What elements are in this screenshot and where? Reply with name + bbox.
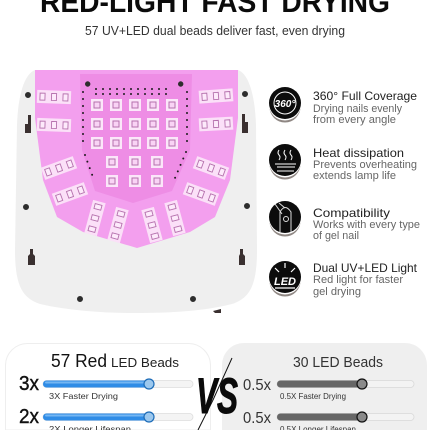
icon: nail: [269, 201, 301, 236]
text: dual light: Red light for faster: [313, 274, 403, 286]
text: 360 coverage: from every angle: [313, 114, 396, 126]
lamp body: [15, 70, 257, 313]
metric: 0.5x drying: 0.5x: [243, 377, 271, 394]
text: heat dissipation: [313, 146, 417, 182]
metric: 2x lifespan: 2x: [19, 406, 39, 428]
text: heat dissipation: Heat dissipation: [313, 146, 404, 160]
icon: 360 arrow: [269, 87, 301, 122]
metric: 0.5x lifespan: [243, 410, 414, 430]
side LED beads: [37, 88, 233, 206]
panel heading: 30 LED Beads: [293, 355, 383, 371]
metric: 0.5x lifespan: 0.5x: [243, 410, 271, 427]
text: 360 coverage: 360° Full Coverage: [313, 89, 417, 103]
text: dual light: gel drying: [313, 286, 361, 298]
icon: heat waves: [269, 144, 301, 180]
text: 360 coverage: Drying nails evenly: [313, 103, 402, 115]
text: dual light: [313, 261, 418, 298]
key slots: [25, 114, 248, 313]
text: heat dissipation: Prevents overheating: [313, 159, 417, 171]
subtitle: 57 UV+LED dual beads deliver fast, even drying: [85, 24, 345, 38]
metric: 3x drying: 3X Faster Drying: [49, 391, 118, 401]
metric: 0.5x drying: 0.5X Faster Drying: [280, 392, 346, 401]
vent dots: [83, 89, 187, 180]
VS badge: [196, 358, 238, 430]
text: 360 coverage: [313, 89, 417, 126]
pink reflector: [35, 70, 238, 248]
metric: 2x lifespan: [19, 406, 193, 430]
inner panel: [80, 74, 192, 203]
center LED beads: [91, 99, 178, 187]
metric: 3x drying: 3x: [19, 373, 39, 395]
text: compatibility: of gel nail: [313, 230, 359, 242]
panel heading: 57 Red: [51, 351, 107, 371]
icon: 360 arrow: 360°: [275, 99, 296, 110]
panel: 30 LED beads: [222, 343, 427, 430]
panel: 57 red LED beads: LED Beads: [111, 355, 180, 370]
feature: dual light: [269, 261, 418, 298]
panel: 57 red LED beads: [6, 343, 210, 430]
text: heat dissipation: extends lamp life: [313, 170, 396, 182]
bottom LED beads: [84, 200, 186, 243]
icon: LED: LED: [274, 276, 296, 288]
feature: 360 coverage: [269, 87, 417, 126]
screw holes: [23, 81, 250, 302]
metric: 3x drying: [19, 373, 193, 401]
icon: LED: [269, 261, 301, 296]
text: compatibility: Compatibility: [313, 206, 390, 220]
nail lamp: [15, 70, 257, 313]
VS badge: VS: [196, 368, 238, 424]
feature: heat dissipation: [269, 144, 417, 182]
metric: 0.5x drying: [243, 377, 414, 401]
text: compatibility: [313, 206, 420, 242]
text: dual light: Dual UV+LED Light: [313, 261, 418, 275]
text: compatibility: Works with every type: [313, 219, 420, 231]
feature: compatibility: [269, 201, 420, 242]
